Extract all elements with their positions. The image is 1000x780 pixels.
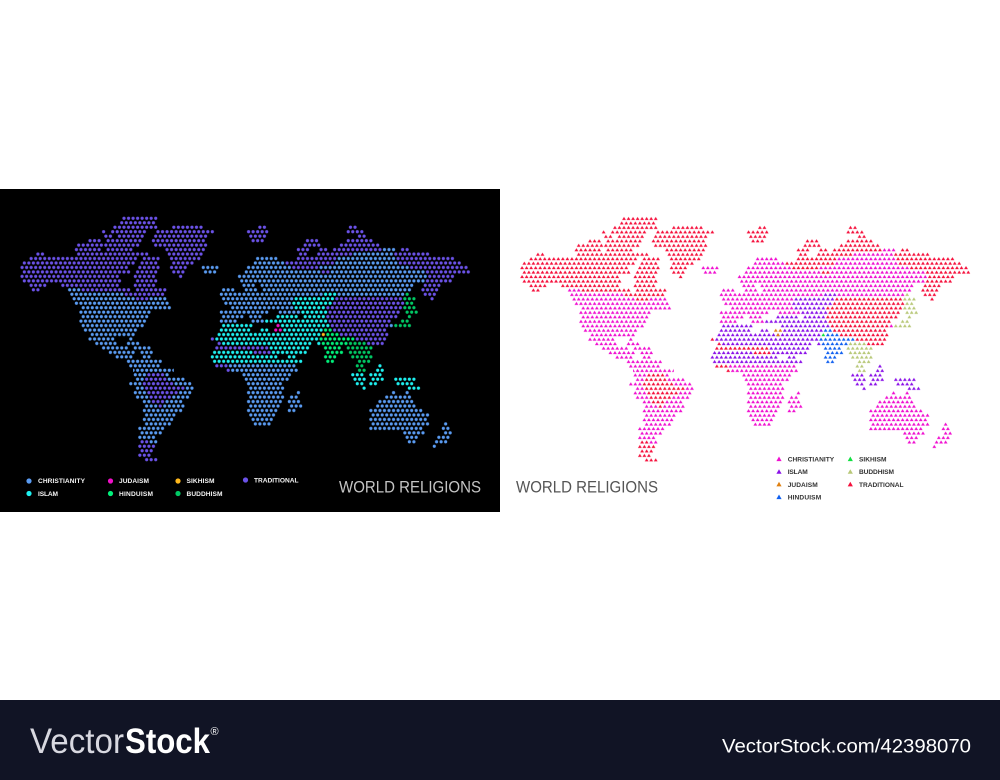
legend item: islam: ISLAM: [788, 469, 808, 476]
legend item: traditional: TRADITIONAL: [859, 482, 904, 489]
footer bar: [0, 700, 1000, 780]
footer logo: ®: [210, 726, 219, 738]
legend item: islam: [26, 491, 58, 498]
legend item: sikhism: SIKHISM: [186, 478, 215, 485]
dotted world map coloured by religion: [20, 216, 471, 462]
title: light panel: WORLD RELIGIONS: [516, 478, 658, 496]
title: dark panel: WORLD RELIGIONS: [339, 478, 481, 496]
legend item: judaism: JUDAISM: [788, 482, 818, 489]
panel: dark world map: [0, 189, 500, 512]
legend item: islam: ISLAM: [38, 491, 58, 498]
footer logo: [30, 722, 219, 761]
legend item: judaism: JUDAISM: [119, 478, 150, 485]
panel: light world map: [516, 216, 971, 502]
legend item: traditional: TRADITIONAL: [254, 478, 298, 484]
legend item: buddhism: BUDDHISM: [859, 469, 894, 476]
legend: light panel: [776, 456, 904, 502]
triangle world map coloured by religion: [520, 216, 971, 462]
legend item: hinduism: HINDUISM: [788, 494, 822, 502]
legend item: hinduism: HINDUISM: [119, 491, 154, 498]
footer logo: Stock: [125, 722, 210, 761]
legend item: christianity: CHRISTIANITY: [38, 478, 86, 485]
legend item: sikhism: SIKHISM: [859, 457, 887, 464]
footer image id: VectorStock.com/42398070: [722, 737, 971, 758]
footer logo: Vector: [30, 722, 124, 761]
legend: dark panel: [26, 477, 299, 498]
legend item: christianity: CHRISTIANITY: [788, 457, 835, 464]
legend item: buddhism: BUDDHISM: [186, 491, 223, 498]
